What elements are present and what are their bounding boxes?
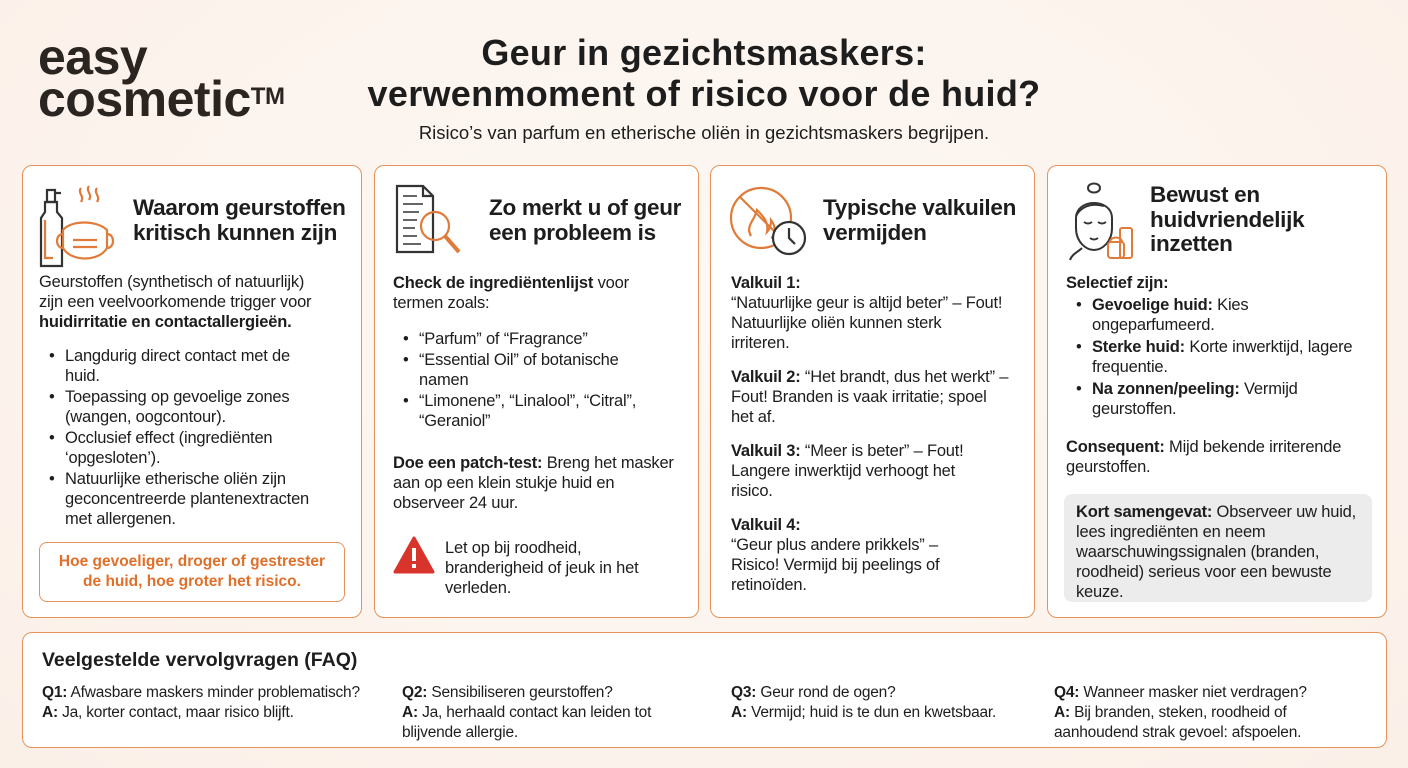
FAQ Q1 bbox=[42, 684, 360, 721]
FAQ Q2 bbox=[402, 684, 652, 741]
FAQ Q1: A: Ja, korter contact, maar risico blijft. bbox=[42, 704, 294, 721]
panel: detection bbox=[374, 165, 699, 618]
summary box: keuze. bbox=[1076, 583, 1123, 601]
text block bbox=[39, 273, 312, 528]
title: verwenmoment of risico voor de huid? bbox=[368, 73, 1040, 114]
text block bbox=[1066, 274, 1352, 476]
text block: Langdurig direct contact met de bbox=[65, 347, 290, 365]
text block: frequentie. bbox=[1092, 358, 1168, 376]
text block: “Geraniol” bbox=[419, 412, 490, 430]
summary box: waarschuwingssignalen (branden, bbox=[1076, 543, 1319, 561]
text block: Valkuil 2: “Het brandt, dus het werkt” – bbox=[731, 368, 1008, 386]
heading bbox=[1150, 182, 1305, 256]
text block: ongeparfumeerd. bbox=[1092, 316, 1215, 334]
text block: risico. bbox=[731, 482, 773, 500]
text block: geurstoffen. bbox=[1092, 400, 1176, 418]
FAQ Q4: A: Bij branden, steken, roodheid of bbox=[1054, 704, 1287, 721]
heading: Zo merkt u of geur bbox=[489, 195, 681, 220]
logo bbox=[38, 29, 284, 127]
text block: Valkuil 3: “Meer is beter” – Fout! bbox=[731, 442, 964, 460]
text block: met allergenen. bbox=[65, 510, 176, 528]
text block: Geurstoffen (synthetisch of natuurlijk) bbox=[39, 273, 304, 291]
text block: “Essential Oil” of botanische bbox=[419, 351, 619, 369]
text block: observeer 24 uur. bbox=[393, 494, 518, 512]
text block: “Limonene”, “Linalool”, “Citral”, bbox=[419, 392, 636, 410]
title bbox=[368, 32, 1040, 114]
text block: Toepassing op gevoelige zones bbox=[65, 388, 289, 406]
heading: Typische valkuilen bbox=[823, 195, 1016, 220]
warning text: branderigheid of jeuk in het bbox=[445, 559, 638, 577]
text block: aan op een klein stukje huid en bbox=[393, 474, 614, 492]
icon: warning bbox=[394, 536, 435, 574]
text block: Na zonnen/peeling: Vermijd bbox=[1092, 380, 1298, 398]
icon: document with magnifier bbox=[396, 184, 460, 254]
text block: “Geur plus andere prikkels” – bbox=[731, 536, 938, 554]
text block: geconcentreerde plantenextracten bbox=[65, 490, 309, 508]
callout bbox=[39, 542, 345, 602]
FAQ Q4: Q4: Wanneer masker niet verdragen? bbox=[1054, 684, 1307, 701]
text block: huidirritatie en contactallergieën. bbox=[39, 313, 291, 331]
FAQ Q2: blijvende allergie. bbox=[402, 724, 518, 741]
text block bbox=[393, 274, 674, 512]
text block: retinoïden. bbox=[731, 576, 807, 594]
text block: “Parfum” of “Fragrance” bbox=[419, 330, 588, 348]
heading: vermijden bbox=[823, 220, 927, 244]
FAQ Q1: Q1: Afwasbare maskers minder problematisch? bbox=[42, 684, 360, 701]
panel: conscious use bbox=[1047, 165, 1387, 618]
text block: zijn een veelvoorkomende trigger voor bbox=[39, 293, 311, 311]
panel: causes bbox=[22, 165, 362, 618]
text block: Gevoelige huid: Kies bbox=[1092, 296, 1248, 314]
text block: Selectief zijn: bbox=[1066, 274, 1168, 292]
FAQ Q4: aanhoudend strak gevoel: afspoelen. bbox=[1054, 724, 1301, 741]
heading: kritisch kunnen zijn bbox=[133, 220, 337, 244]
heading: inzetten bbox=[1150, 231, 1233, 256]
text block: Occlusief effect (ingrediënten bbox=[65, 429, 272, 447]
FAQ Q2: A: Ja, herhaald contact kan leiden tot bbox=[402, 704, 651, 721]
icon: no fire with clock bbox=[730, 186, 806, 256]
heading bbox=[823, 195, 1016, 244]
summary box bbox=[1064, 494, 1372, 602]
text block: Natuurlijke oliën kunnen sterk bbox=[731, 314, 941, 332]
FAQ Q2: Q2: Sensibiliseren geurstoffen? bbox=[402, 684, 613, 701]
heading: huidvriendelijk bbox=[1150, 206, 1304, 232]
text block: Check de ingrediëntenlijst voor bbox=[393, 274, 629, 292]
text block: ‘opgesloten’). bbox=[65, 449, 160, 467]
text block: Valkuil 1: bbox=[731, 274, 801, 292]
title: Geur in gezichtsmaskers: bbox=[481, 32, 927, 73]
summary box: Kort samengevat: Observeer uw huid, bbox=[1076, 503, 1356, 521]
FAQ Q3: Q3: Geur rond de ogen? bbox=[731, 684, 896, 701]
summary box: roodheid) serieus voor een bewuste bbox=[1076, 563, 1332, 581]
heading: Waarom geurstoffen bbox=[133, 195, 346, 220]
text block: irriteren. bbox=[731, 334, 790, 352]
logo: easy bbox=[38, 29, 147, 85]
text block: geurstoffen. bbox=[1066, 458, 1150, 476]
text block bbox=[731, 274, 1008, 594]
callout: de huid, hoe groter het risico. bbox=[83, 573, 301, 590]
text block: Doe een patch-test: Breng het masker bbox=[393, 454, 674, 472]
heading bbox=[489, 195, 682, 244]
text block: Valkuil 4: bbox=[731, 516, 801, 534]
text block: Natuurlijke etherische oliën zijn bbox=[65, 470, 286, 488]
summary box: lees ingrediënten en neem bbox=[1076, 523, 1265, 541]
warning text: Let op bij roodheid, bbox=[445, 539, 581, 557]
text block: namen bbox=[419, 371, 468, 389]
text block: “Natuurlijke geur is altijd beter” – Fout! bbox=[731, 294, 1002, 312]
text block: Consequent: Mijd bekende irriterende bbox=[1066, 438, 1341, 456]
subtitle: Risico’s van parfum en etherische oliën in gezichtsmaskers begrijpen. bbox=[419, 122, 989, 143]
panel: FAQ bbox=[22, 632, 1387, 748]
text block: Langere inwerktijd verhoogt het bbox=[731, 462, 955, 480]
warning text bbox=[445, 539, 639, 597]
warning text: verleden. bbox=[445, 579, 511, 597]
icon: spray and mask bbox=[40, 185, 114, 268]
FAQ Q3: A: Vermijd; huid is te dun en kwetsbaar. bbox=[731, 704, 996, 721]
callout: Hoe gevoeliger, droger of gestrester bbox=[59, 553, 325, 570]
heading: een probleem is bbox=[489, 220, 656, 244]
heading: Bewust en bbox=[1150, 182, 1260, 207]
FAQ Q3 bbox=[731, 684, 996, 721]
text block: (wangen, oogcontour). bbox=[65, 408, 226, 426]
text block: huid. bbox=[65, 367, 100, 385]
text block: Sterke huid: Korte inwerktijd, lagere bbox=[1092, 338, 1352, 356]
text block: Fout! Branden is vaak irritatie; spoel bbox=[731, 388, 987, 406]
logo: cosmeticTM bbox=[38, 71, 284, 127]
text block: termen zoals: bbox=[393, 294, 489, 312]
FAQ Q4 bbox=[1054, 684, 1307, 741]
panel: pitfalls bbox=[710, 165, 1035, 618]
icon: face with cream bbox=[1069, 182, 1133, 260]
text block: Risico! Vermijd bij peelings of bbox=[731, 556, 939, 574]
text block: het af. bbox=[731, 408, 775, 426]
heading bbox=[133, 195, 346, 244]
FAQ heading: Veelgestelde vervolgvragen (FAQ) bbox=[42, 649, 357, 671]
